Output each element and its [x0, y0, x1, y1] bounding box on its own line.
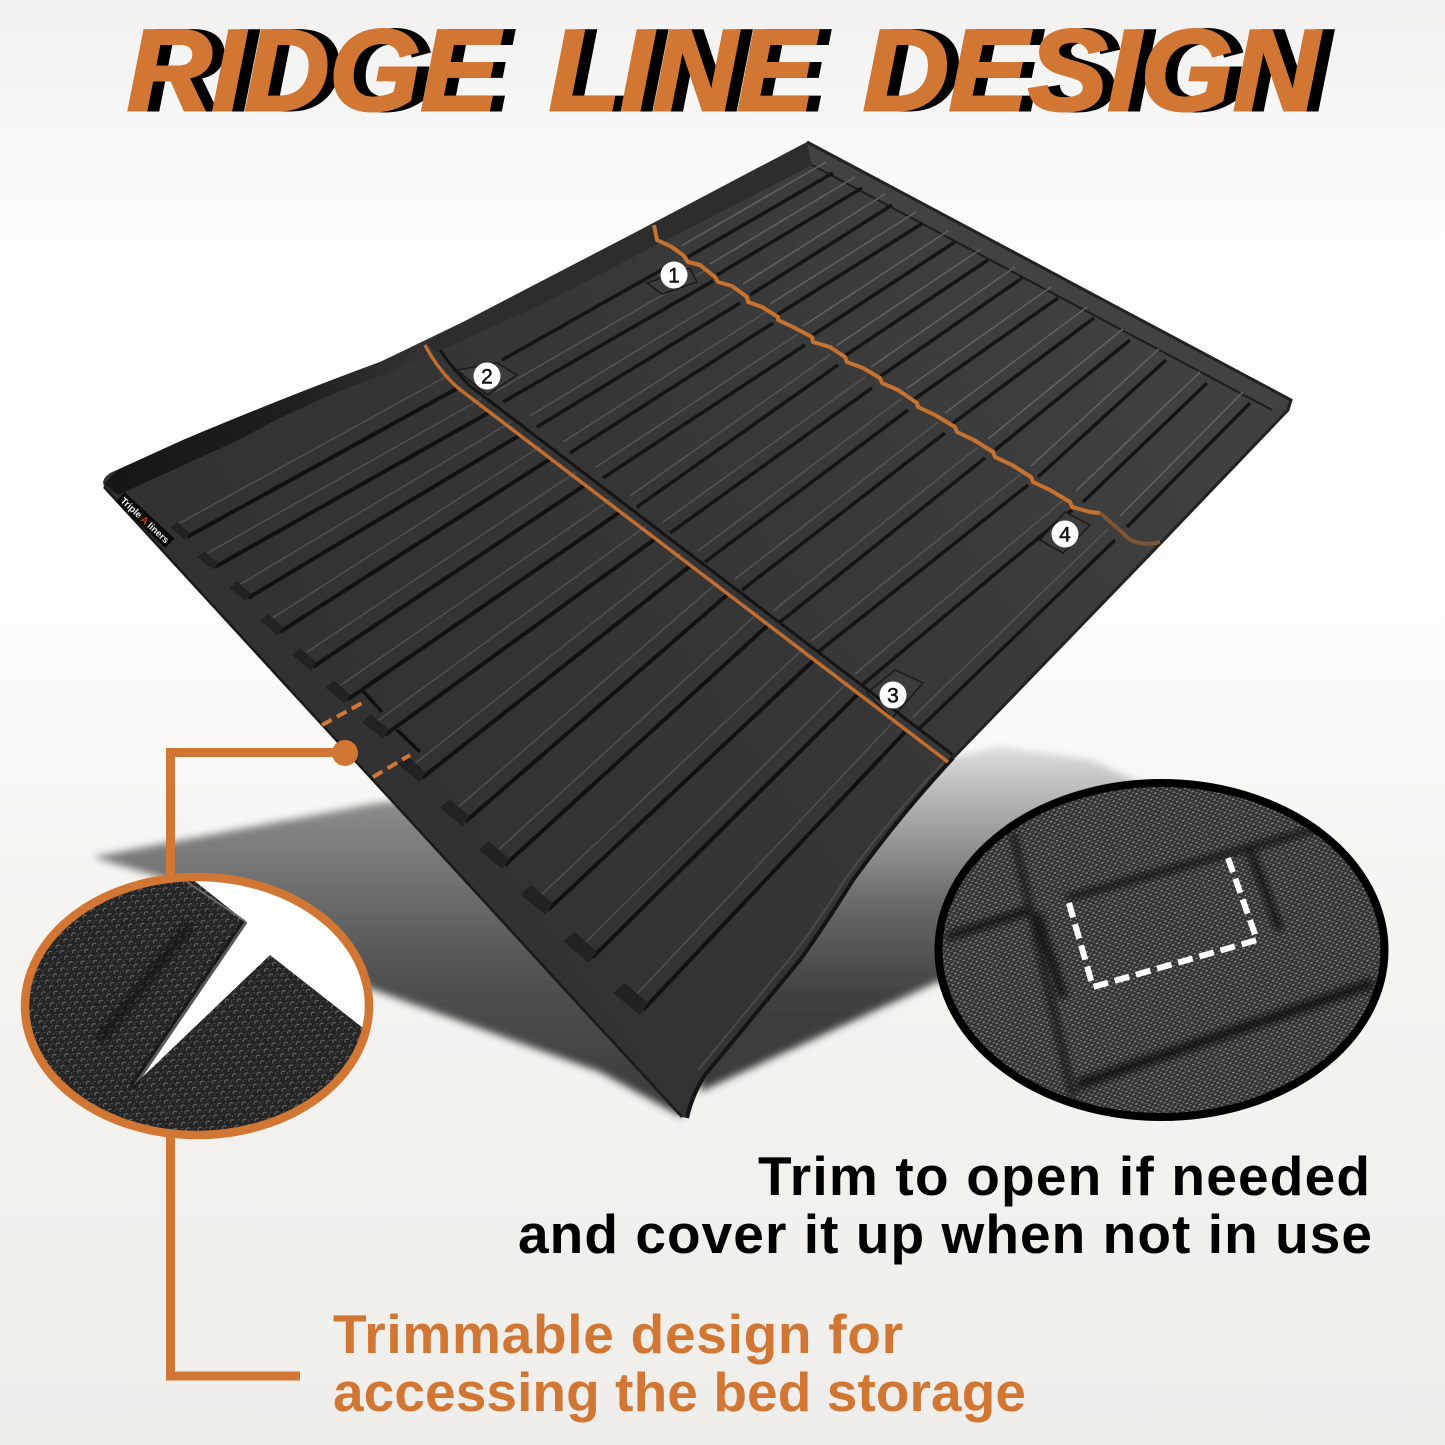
number badge 4 [1052, 520, 1078, 548]
caption: trimmable design: Trimmable design for [333, 1303, 903, 1365]
caption: trimmable design [333, 1303, 1026, 1423]
number badge 1: 1 [668, 264, 680, 288]
leader line: trim callout [170, 752, 345, 1376]
ridge shadows [947, 830, 1373, 1097]
caption: trim to open: Trim to open if needed [758, 1145, 1370, 1207]
caption: trim to open [518, 1145, 1372, 1265]
title [127, 7, 1334, 135]
mat body [103, 142, 1291, 1118]
cut opening [132, 881, 365, 1087]
title: DESIGN [875, 7, 1334, 135]
right zoom lens: notch detail [938, 783, 1384, 1117]
ridge end caps [170, 522, 648, 1015]
ridge line 2: stepped seam [654, 225, 1160, 544]
number badge 1 [660, 262, 688, 288]
title: LINE [561, 7, 830, 135]
numbered notches [457, 268, 1090, 718]
number badge 2 [474, 362, 500, 390]
rear section ridges [681, 162, 1250, 527]
number badge 3 [880, 682, 906, 708]
seam groove [440, 350, 953, 755]
mat shadow [93, 747, 1200, 1117]
middle section ridges [496, 268, 1115, 728]
white trim outline [1069, 858, 1257, 987]
left zoom lens: cut flap detail [25, 860, 385, 1135]
trim guide dashes [322, 703, 410, 777]
ridge line 1: straight seam [425, 345, 948, 762]
title: RIDGE [127, 7, 502, 135]
number badge 3: 3 [887, 684, 899, 708]
side walls [104, 142, 1291, 1118]
caption: trimmable design: accessing the bed storage [333, 1361, 1026, 1423]
number badge 4: 4 [1059, 524, 1071, 546]
trimmable flap notches [362, 690, 420, 752]
leader dot [332, 740, 358, 766]
truck bed mat [103, 142, 1291, 1118]
title: DESIGN [863, 7, 1322, 135]
number badge 2: 2 [481, 366, 493, 388]
brand label: Triple A liners [118, 496, 171, 546]
title: LINE [549, 7, 818, 135]
caption: trim to open: and cover it up when not in use [518, 1203, 1372, 1265]
front section ridges [178, 375, 905, 1010]
title: RIDGE [139, 7, 514, 135]
